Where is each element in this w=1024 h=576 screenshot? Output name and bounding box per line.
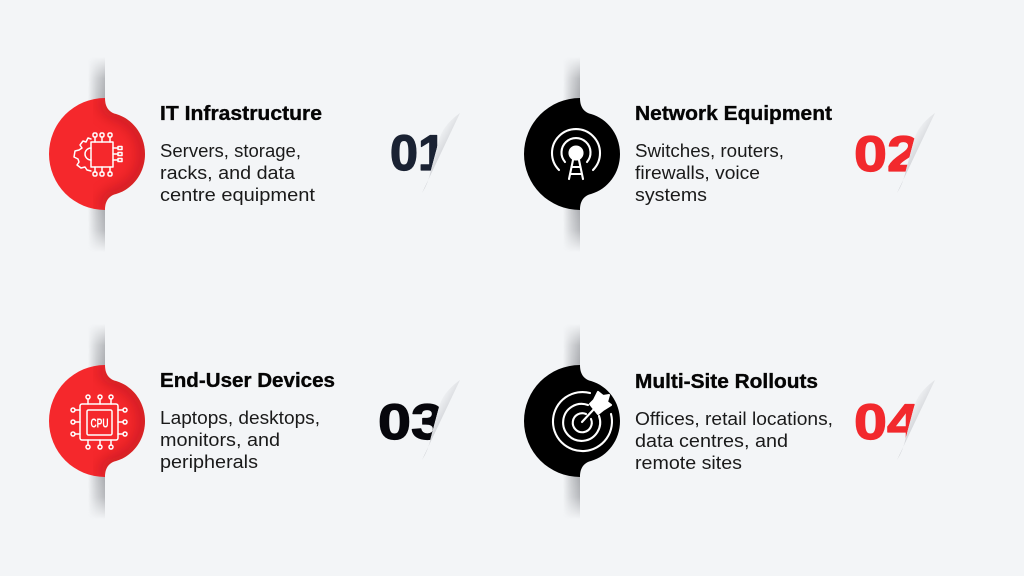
description	[635, 409, 833, 473]
description	[160, 141, 315, 205]
icon: target with arrow	[553, 392, 612, 451]
heading: Multi-Site Rollouts	[635, 371, 818, 393]
description: Switches, routers,	[635, 141, 784, 161]
number 03	[378, 380, 460, 460]
panel: IT Infrastructure	[49, 57, 460, 252]
description: peripherals	[160, 452, 258, 472]
description	[635, 141, 784, 205]
description: Offices, retail locations,	[635, 409, 833, 429]
description: firewalls, voice	[635, 163, 760, 183]
heading: Network Equipment	[635, 103, 832, 125]
number 02	[854, 113, 935, 193]
description: data centres, and	[635, 431, 788, 451]
number 03: 03	[378, 394, 444, 450]
badge: black circle with shadows	[524, 324, 620, 519]
number 02: 02	[854, 126, 920, 182]
badge: red circle with shadows	[49, 57, 145, 252]
description: racks, and data	[160, 163, 296, 183]
heading: IT Infrastructure	[160, 103, 322, 125]
icon: CPU chip	[71, 395, 127, 449]
heading: End-User Devices	[160, 370, 335, 392]
description: systems	[635, 185, 707, 205]
description	[160, 408, 320, 472]
description: Servers, storage,	[160, 141, 301, 161]
description: centre equipment	[160, 185, 315, 205]
number 01	[390, 113, 460, 193]
infographic canvas	[49, 60, 934, 516]
number 01: 01	[390, 125, 446, 181]
panel: Multi-Site Rollouts	[524, 324, 935, 519]
number 04	[854, 380, 935, 460]
panel: Network Equipment	[524, 57, 935, 252]
badge: red circle with shadows	[49, 324, 145, 519]
icon: antenna tower	[552, 129, 600, 179]
badge: black circle with shadows	[524, 57, 620, 252]
icon: chip with gear	[74, 133, 122, 176]
description: Laptops, desktops,	[160, 408, 320, 428]
description: remote sites	[635, 453, 742, 473]
panel: End-User Devices	[49, 324, 460, 519]
description: monitors, and	[160, 430, 280, 450]
icon: CPU chip: CPU	[90, 416, 108, 430]
number 04: 04	[854, 394, 920, 450]
